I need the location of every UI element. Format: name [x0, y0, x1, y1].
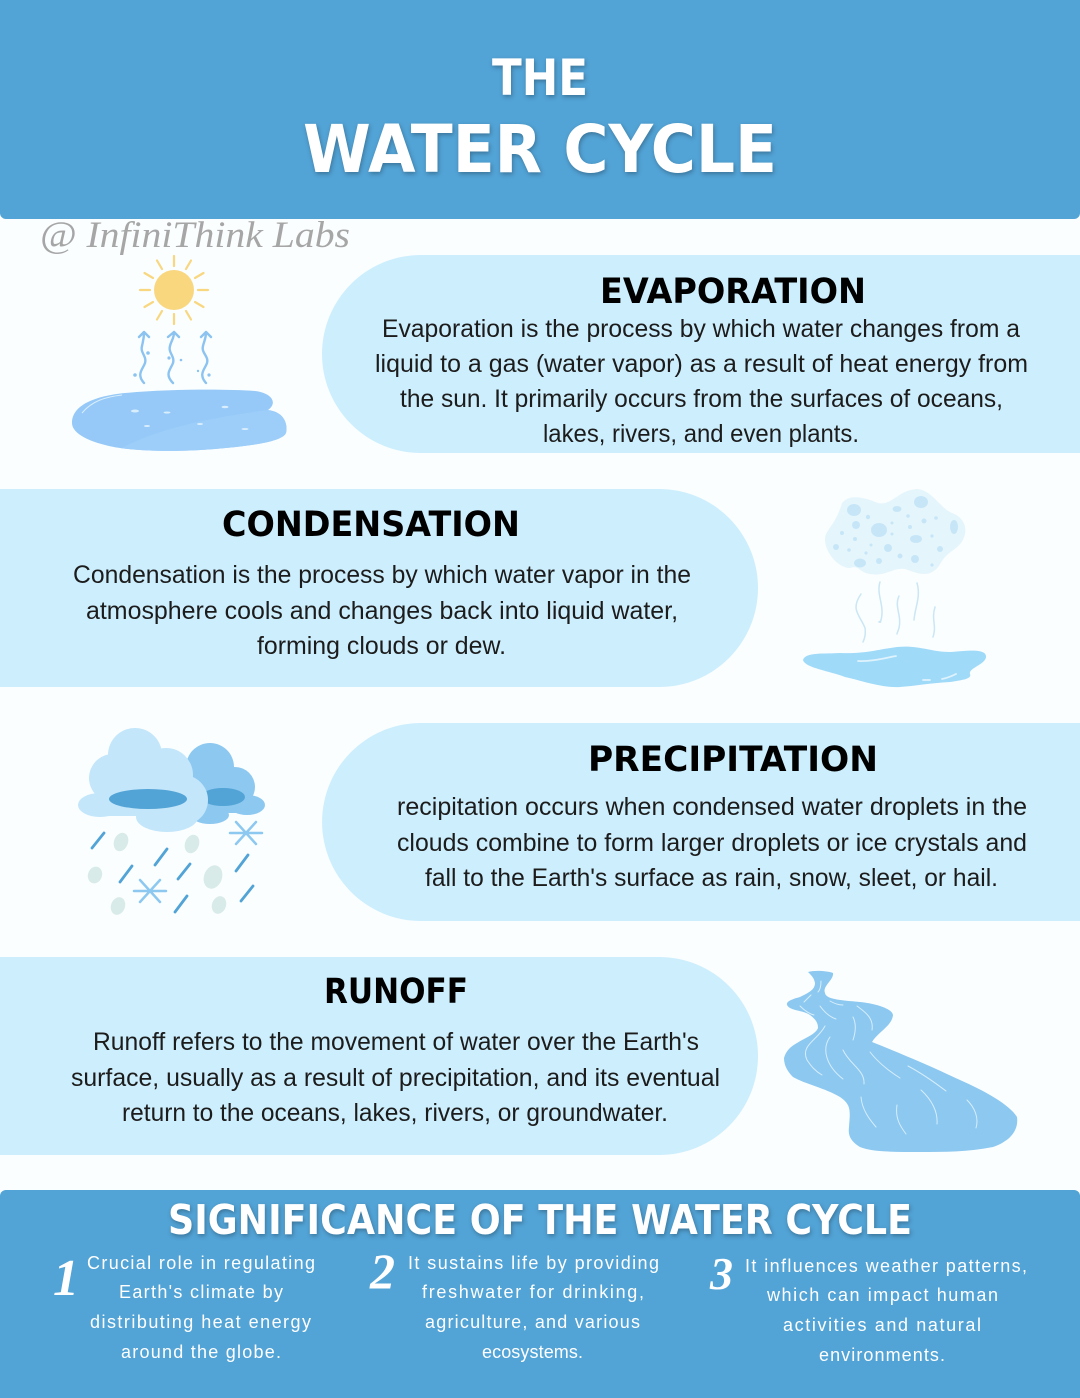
heading: condensation: CONDENSATION	[222, 505, 520, 545]
watermark: @ InfiniThink Labs	[40, 215, 350, 256]
text: evaporation description: liquid to a gas (water vapor) as a result of heat energy from	[375, 350, 1028, 378]
point 2: agriculture, and various	[425, 1312, 640, 1332]
heading: evaporation: EVAPORATION	[600, 272, 866, 312]
text: runoff description: return to the oceans, lakes, rivers, or groundwater.	[122, 1099, 668, 1127]
point 2: 2	[369, 1243, 395, 1299]
panel: precipitation	[322, 723, 1080, 921]
point 1	[53, 1250, 315, 1362]
heading: precipitation: PRECIPITATION	[588, 740, 878, 780]
point 2: freshwater for drinking,	[422, 1282, 644, 1302]
text: evaporation description: the sun. It primarily occurs from the surfaces of oceans,	[400, 385, 1003, 413]
icon: rain streaks	[92, 833, 253, 912]
text: evaporation description: Evaporation is the process by which water changes from a	[382, 315, 1020, 343]
icon: snowflakes	[134, 822, 262, 902]
icon: puddle	[803, 647, 986, 687]
point 1: Earth's climate by	[119, 1282, 283, 1302]
text: runoff description: Runoff refers to the movement of water over the Earth's	[93, 1028, 699, 1056]
panel: significance of the water cycle	[0, 1190, 1080, 1398]
title	[303, 49, 777, 188]
icon: cloud above puddle	[803, 489, 986, 687]
point 3	[709, 1248, 1027, 1365]
icon: river	[784, 971, 1017, 1152]
point 3: environments.	[819, 1345, 945, 1365]
point 1: around the globe.	[121, 1342, 281, 1362]
text: runoff description	[71, 1028, 720, 1127]
text: evaporation description: lakes, rivers, and even plants.	[543, 420, 859, 448]
title: WATER CYCLE	[303, 111, 777, 188]
icon: front cloud	[78, 728, 208, 832]
point 1: distributing heat energy	[90, 1312, 311, 1332]
icon: storm clouds with rain and snow	[78, 728, 265, 917]
panel: runoff	[0, 957, 758, 1155]
point 2	[369, 1243, 659, 1362]
text: condensation description: atmosphere cools and changes back into liquid water,	[86, 597, 678, 625]
point 3: 3	[709, 1248, 733, 1299]
text: precipitation description: recipitation occurs when condensed water droplets in the	[397, 793, 1027, 821]
point 1: Crucial role in regulating	[87, 1253, 315, 1273]
text: condensation description: Condensation is the process by which water vapor in the	[73, 561, 691, 589]
text: precipitation description: clouds combine to form larger droplets or ice crystals and	[397, 829, 1027, 857]
text: runoff description: surface, usually as a result of precipitation, and its eventual	[71, 1064, 720, 1092]
point 1: 1	[53, 1250, 79, 1307]
point 3: It influences weather patterns,	[745, 1256, 1027, 1276]
title: THE	[492, 49, 588, 107]
point 3: which can impact human	[766, 1285, 998, 1305]
icon: sun over pond with rising vapor	[72, 256, 295, 455]
icon: sun	[140, 256, 208, 324]
heading: significance: SIGNIFICANCE OF THE WATER CYCLE	[168, 1196, 912, 1244]
icon: back cloud	[186, 743, 265, 824]
point 2: ecosystems.	[482, 1342, 583, 1362]
icon: sleet drops	[86, 831, 229, 917]
header banner	[0, 0, 1080, 219]
icon: vapor lines	[856, 582, 935, 642]
icon: vapor arrows	[133, 332, 211, 383]
text: precipitation description	[397, 793, 1027, 892]
point 3: activities and natural	[783, 1315, 981, 1335]
heading: runoff: RUNOFF	[324, 972, 468, 1012]
icon: speckled cloud	[825, 489, 965, 575]
text: condensation description	[73, 561, 691, 660]
text: evaporation description	[375, 315, 1028, 448]
text: condensation description: forming clouds or dew.	[257, 632, 506, 660]
panel: condensation	[0, 489, 758, 687]
icon: pond	[72, 390, 295, 455]
point 2: It sustains life by providing	[408, 1253, 659, 1273]
panel: evaporation	[322, 255, 1080, 453]
text: precipitation description: fall to the Earth's surface as rain, snow, sleet, or hail.	[425, 864, 998, 892]
